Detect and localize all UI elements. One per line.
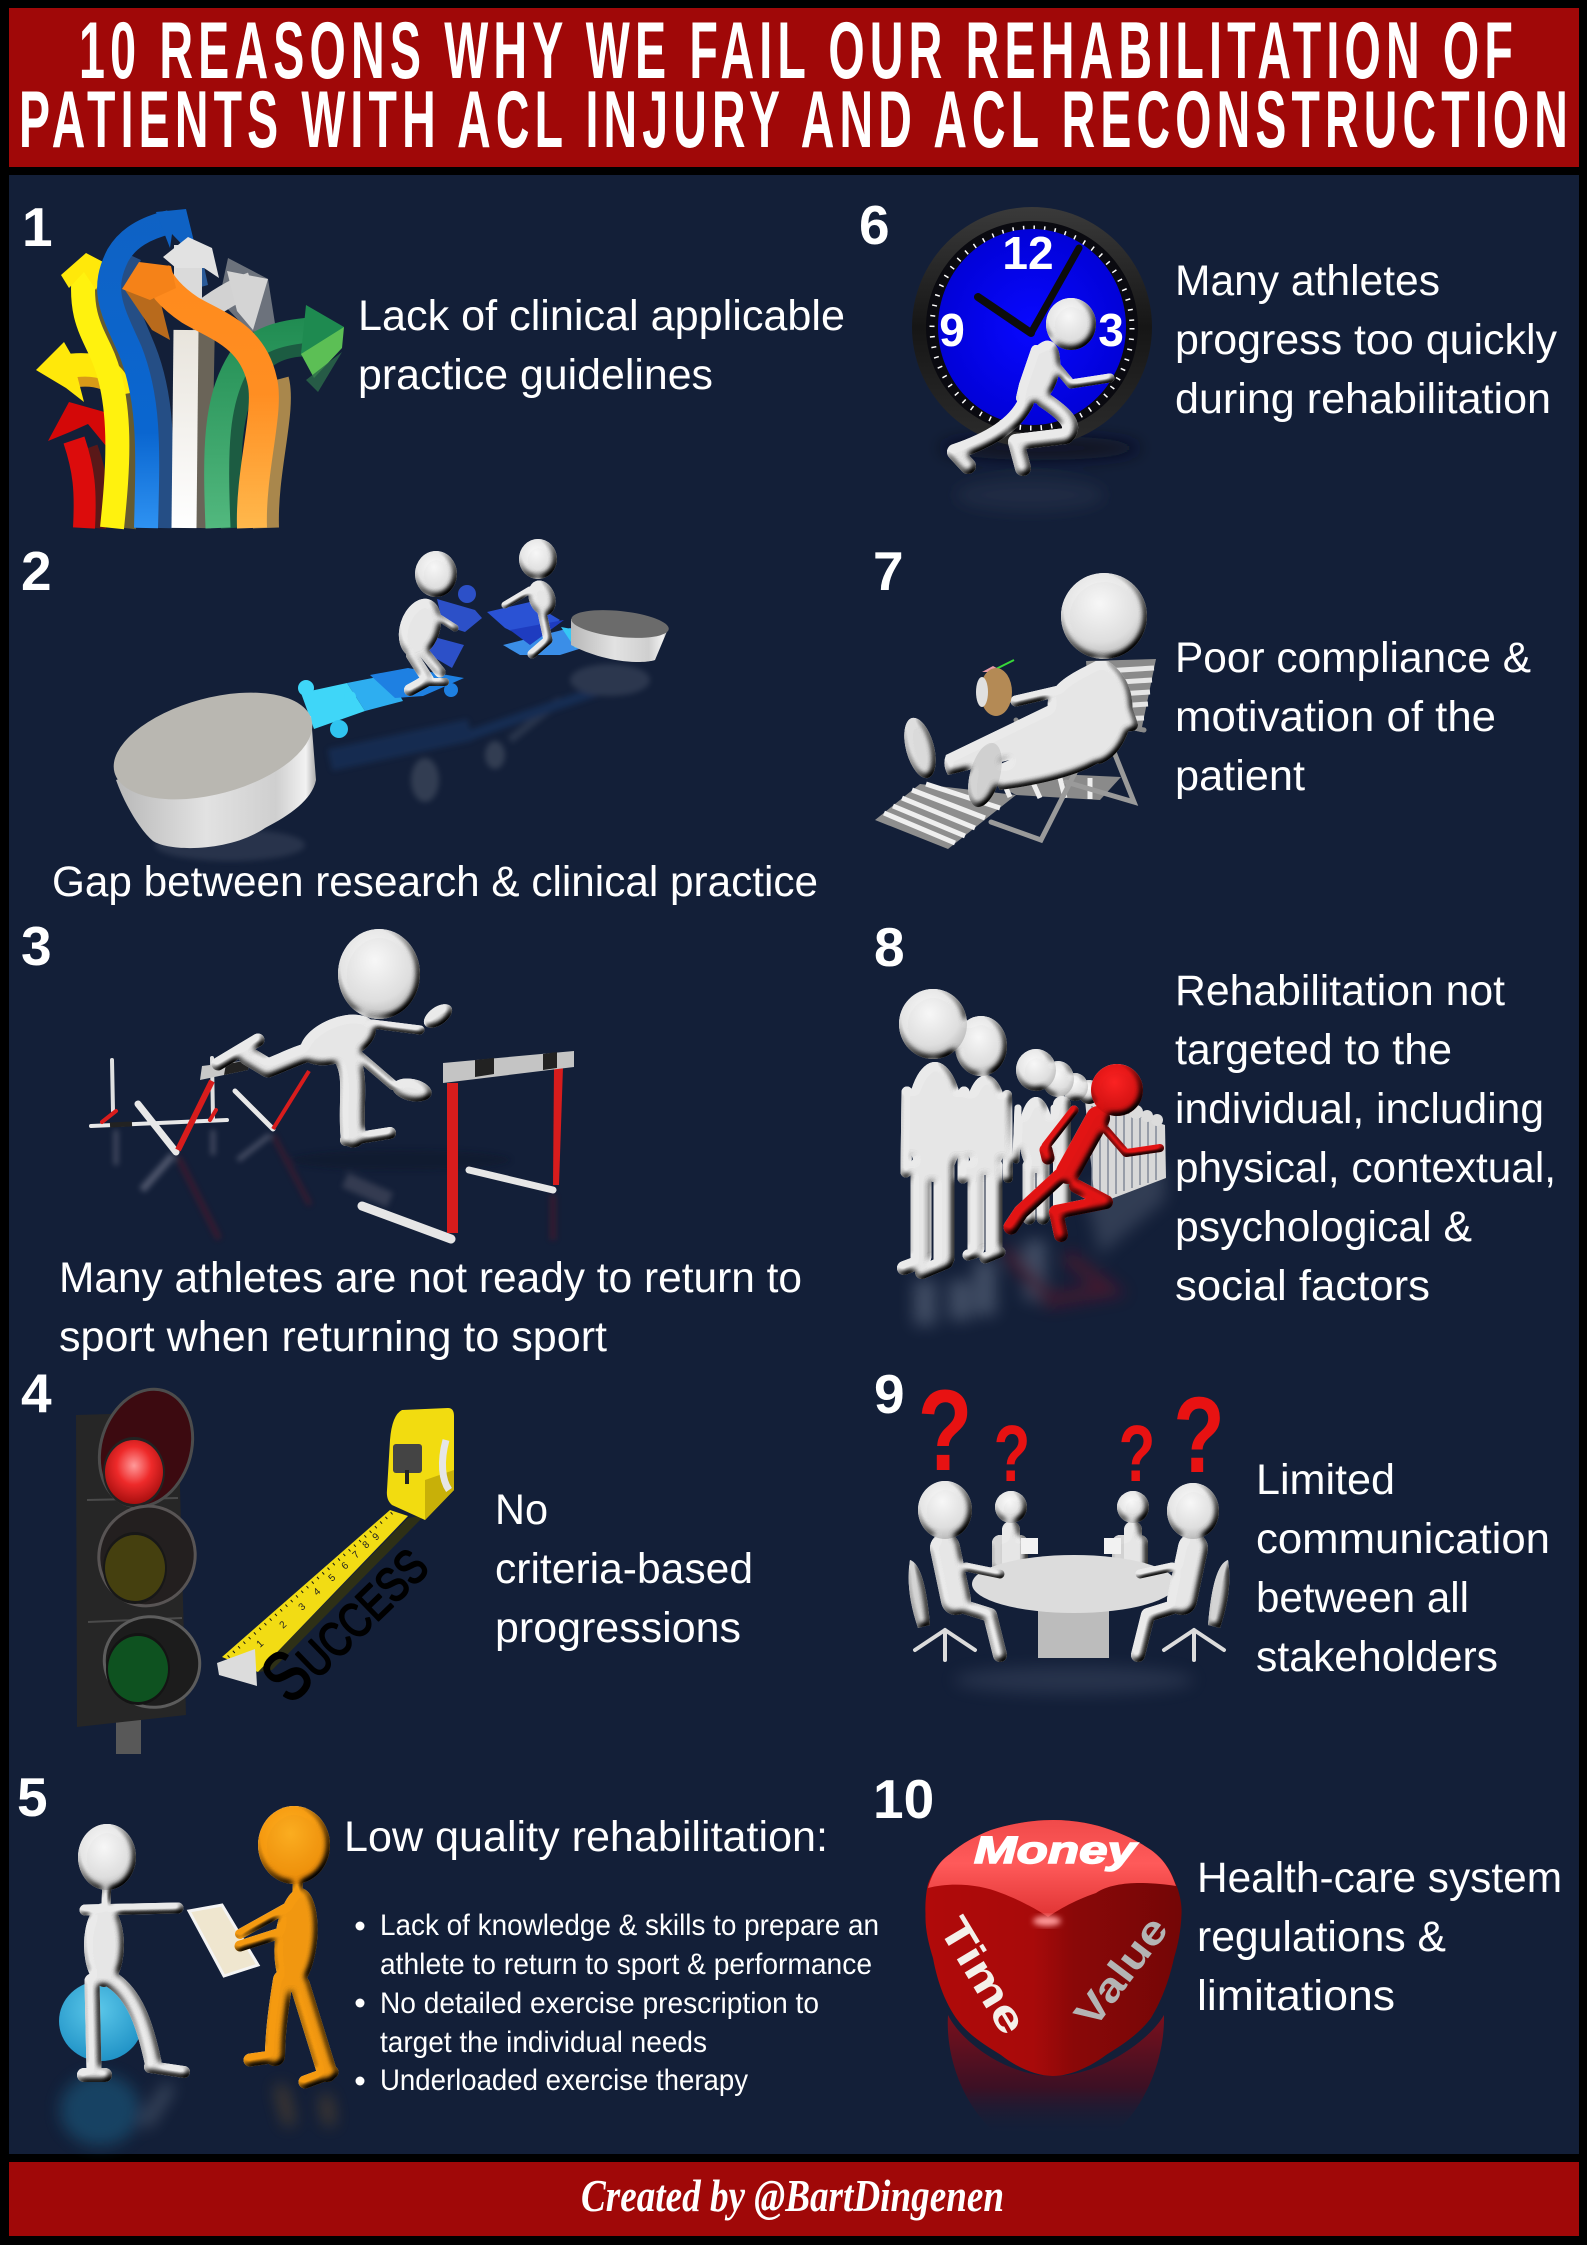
text 7: Poor compliance & bbox=[1175, 634, 1531, 682]
text 3: Many athletes are not ready to return to bbox=[59, 1254, 802, 1302]
text 9: communication bbox=[1256, 1515, 1550, 1563]
text 9 bbox=[1256, 1456, 1550, 1681]
icon: reflection of meeting bbox=[954, 1666, 1194, 1694]
icon: figure on exercise ball bbox=[59, 1824, 184, 2075]
footer banner: Created by @BartDingenen bbox=[581, 2170, 1004, 2221]
icon: measuring tape bbox=[217, 1408, 454, 1686]
red question marks: ? bbox=[918, 1366, 972, 1495]
number 7: 7 bbox=[873, 540, 904, 602]
icon: meeting table with figures bbox=[909, 1481, 1229, 1660]
icon: colored arrows bbox=[36, 209, 344, 528]
text 4: No bbox=[495, 1486, 548, 1534]
text 8: individual, including bbox=[1175, 1085, 1544, 1133]
icon: clock: 3 bbox=[1098, 304, 1124, 356]
icon: puzzle bridge bbox=[298, 585, 620, 738]
red question marks: ? bbox=[1173, 1374, 1225, 1495]
number 3: 3 bbox=[21, 915, 52, 977]
icon: clock bbox=[912, 207, 1152, 447]
text 8 bbox=[1175, 967, 1556, 1310]
footer banner bbox=[9, 2162, 1579, 2236]
reason 8: not individualized bbox=[874, 916, 1556, 1325]
text 8: Rehabilitation not bbox=[1175, 967, 1505, 1015]
reason 4: criteria-based progressions bbox=[21, 1362, 753, 1754]
icon: standing hurdle bbox=[362, 1051, 574, 1239]
bullet list: Underloaded exercise therapy bbox=[380, 2064, 748, 2097]
number 2: 2 bbox=[21, 540, 52, 602]
text 1 bbox=[358, 292, 845, 399]
bullet list: target the individual needs bbox=[380, 2026, 707, 2059]
text 10 bbox=[1197, 1854, 1562, 2020]
icon: small disc bbox=[570, 606, 670, 662]
text 2: Gap between research & clinical practice bbox=[52, 858, 818, 906]
bullet list bbox=[356, 1909, 879, 2097]
text 3 bbox=[59, 1254, 802, 1361]
icon: large disc bbox=[102, 673, 324, 848]
text 7: motivation of the bbox=[1175, 693, 1496, 741]
icon: red dice bbox=[925, 1820, 1182, 2076]
text 8: psychological & bbox=[1175, 1203, 1472, 1251]
bullet list: athlete to return to sport & performance bbox=[380, 1948, 872, 1981]
handwritten word success: SUCCESS bbox=[246, 1525, 441, 1717]
icon: coconut drink bbox=[976, 660, 1014, 716]
number 9: 9 bbox=[874, 1363, 905, 1425]
reason 9: limited communication bbox=[874, 1363, 1550, 1694]
icon: clipboard bbox=[189, 1905, 258, 1976]
icon: measuring tape: 2 bbox=[278, 1619, 289, 1631]
icon: dice reflection bbox=[948, 2015, 1164, 2136]
number 5: 5 bbox=[17, 1766, 48, 1828]
reason 5: low quality rehabilitation bbox=[17, 1766, 879, 2146]
text 9: stakeholders bbox=[1256, 1633, 1498, 1681]
icon: traffic light bbox=[76, 1377, 212, 1754]
number 1: 1 bbox=[22, 196, 53, 258]
text 1: practice guidelines bbox=[358, 351, 713, 399]
icon: reflections of queue bbox=[925, 1165, 1165, 1325]
reason 3: return to sport bbox=[21, 915, 802, 1361]
icon: reclining figure bbox=[898, 573, 1147, 811]
text 7 bbox=[1175, 634, 1531, 800]
text 6: progress too quickly bbox=[1175, 316, 1557, 364]
icon: sun lounger bbox=[875, 659, 1156, 849]
icon: measuring tape: 4 bbox=[312, 1586, 323, 1598]
icon: hurdling figure bbox=[218, 929, 456, 1140]
text 6: during rehabilitation bbox=[1175, 375, 1551, 423]
icon: clock: 12 bbox=[1002, 227, 1054, 279]
icon: reflections of figures bbox=[60, 2074, 330, 2146]
number 6: 6 bbox=[859, 194, 890, 256]
icon: measuring tape: 6 bbox=[340, 1560, 351, 1572]
icon: knocked hurdles bbox=[91, 1058, 309, 1152]
number 4: 4 bbox=[21, 1362, 52, 1424]
bullet list: Lack of knowledge & skills to prepare an bbox=[380, 1909, 879, 1942]
icon: measuring tape: 8 bbox=[361, 1539, 372, 1551]
text 9: Limited bbox=[1256, 1456, 1395, 1504]
bullet list: No detailed exercise prescription to bbox=[380, 1987, 819, 2020]
icon: red running figure bbox=[1011, 1064, 1160, 1235]
number 10: 10 bbox=[873, 1768, 934, 1830]
reason 1: guidelines bbox=[22, 196, 845, 528]
icon: orange coach figure bbox=[240, 1806, 332, 2082]
reason 2: research gap bbox=[21, 539, 818, 906]
text 5 heading: Low quality rehabilitation: bbox=[344, 1813, 828, 1861]
icon: reflection of puzzle bridge bbox=[155, 664, 650, 861]
die word value: Value bbox=[1066, 1908, 1177, 2035]
text 9: between all bbox=[1256, 1574, 1469, 1622]
text 7: patient bbox=[1175, 752, 1305, 800]
red question marks: ? bbox=[994, 1409, 1030, 1498]
text 10: limitations bbox=[1197, 1972, 1395, 2020]
reason 10: health-care regulations bbox=[873, 1768, 1562, 2136]
icon: clock shadow and reflection bbox=[940, 436, 1140, 511]
text 8: targeted to the bbox=[1175, 1026, 1452, 1074]
icon: measuring tape: 9 bbox=[371, 1531, 382, 1543]
icon: measuring tape: 5 bbox=[327, 1572, 338, 1584]
text 4 bbox=[495, 1486, 753, 1652]
text 8: social factors bbox=[1175, 1262, 1430, 1310]
icon: two figures placing puzzle pieces bbox=[392, 539, 560, 690]
text 3: sport when returning to sport bbox=[59, 1313, 607, 1361]
icon: crowd of white figures bbox=[899, 989, 1166, 1272]
text 4: progressions bbox=[495, 1604, 741, 1652]
icon: running figure bbox=[955, 298, 1110, 468]
text 10: regulations & bbox=[1197, 1913, 1446, 1961]
die word time: Time bbox=[930, 1908, 1036, 2042]
text 10: Health-care system bbox=[1197, 1854, 1562, 1902]
text 6: Many athletes bbox=[1175, 257, 1440, 305]
die word money: Money bbox=[974, 1830, 1138, 1872]
text 4: criteria-based bbox=[495, 1545, 753, 1593]
icon: clock: 9 bbox=[939, 304, 965, 356]
icon: measuring tape: 7 bbox=[351, 1549, 362, 1561]
number 8: 8 bbox=[874, 916, 905, 978]
reason 6: progress too quickly bbox=[859, 194, 1557, 511]
title banner bbox=[9, 6, 1579, 167]
icon: measuring tape: 1 bbox=[255, 1638, 266, 1650]
red question marks bbox=[918, 1366, 1225, 1498]
reason 7: compliance and motivation bbox=[873, 540, 1531, 849]
text 1: Lack of clinical applicable bbox=[358, 292, 845, 340]
icon: hurdle reflections bbox=[116, 1130, 553, 1240]
icon: measuring tape: 3 bbox=[297, 1601, 308, 1613]
text 6 bbox=[1175, 257, 1557, 423]
red question marks: ? bbox=[1119, 1409, 1155, 1498]
text 8: physical, contextual, bbox=[1175, 1144, 1556, 1192]
